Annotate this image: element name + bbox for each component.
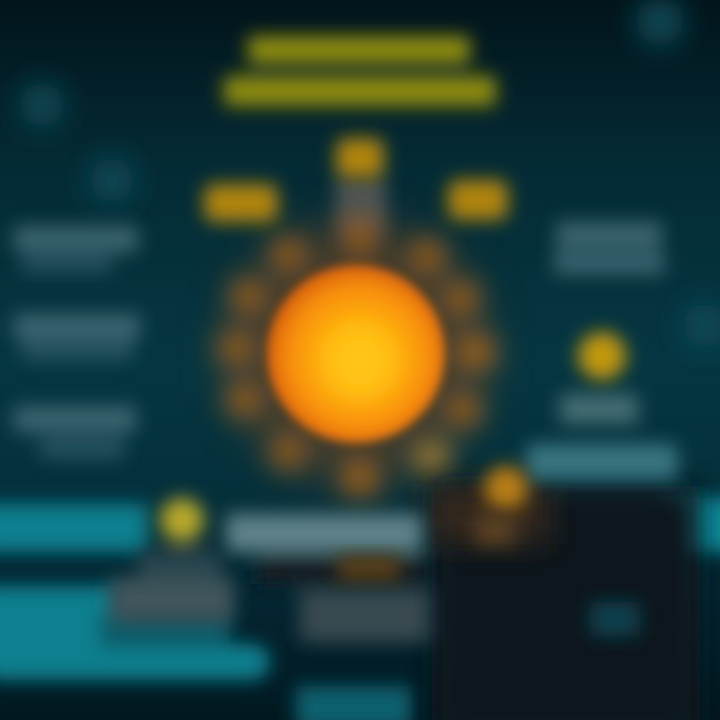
top column below icon [336,178,386,234]
right text block [554,222,664,274]
right platform top [526,394,678,480]
water bands [0,498,720,720]
sun rays [220,222,494,496]
center platform [226,514,430,642]
left platform [110,498,234,622]
bottom orange hint [338,556,400,580]
left text blocks [14,226,140,458]
title [224,36,496,106]
top icon badges [204,138,508,222]
center yellow icon [484,466,528,510]
sun [267,265,445,443]
brown tint on platform [430,484,550,544]
lower center-right accent [475,515,515,545]
right yellow icon [578,332,626,380]
platform teal glint [590,602,640,636]
sun glow [228,224,484,480]
background bokeh dots [20,0,720,347]
dark right platform [432,486,700,720]
